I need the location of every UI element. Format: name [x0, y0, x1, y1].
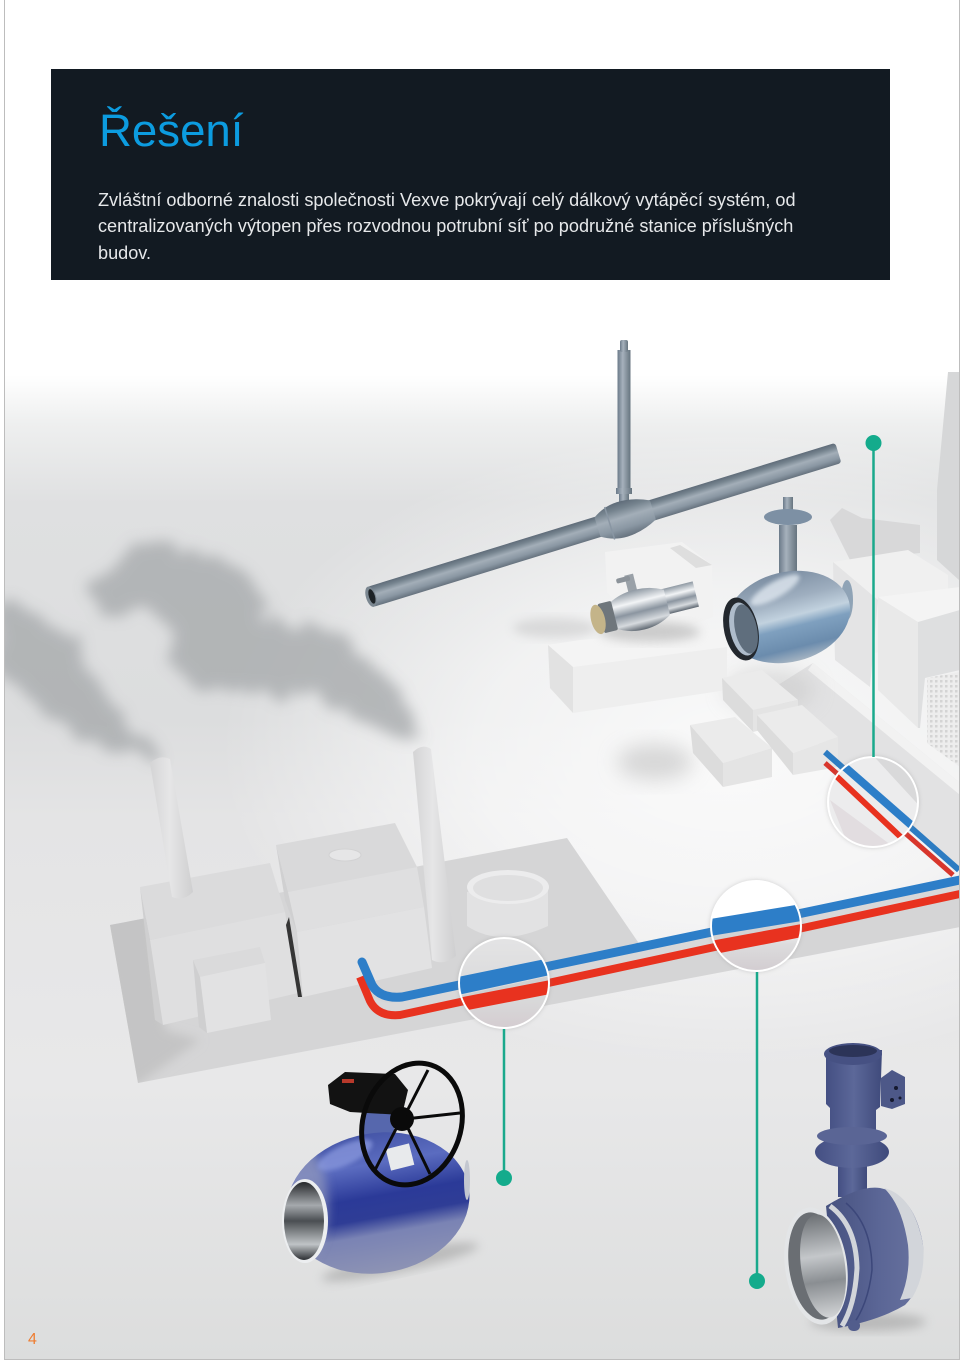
box B [757, 705, 838, 775]
box A [722, 670, 798, 732]
left building [140, 863, 298, 1025]
door annex [193, 960, 271, 1033]
magnifier lens 1 [458, 937, 550, 1029]
pre-insulated pipe with long stem valve [361, 340, 844, 615]
title: Řešení [99, 105, 243, 156]
smoke plume from the tall chimney [90, 546, 425, 740]
district heating pipes [360, 752, 960, 1015]
heat plant buildings [140, 747, 549, 1033]
magnifier lens 2 [710, 880, 802, 972]
bolted crown [824, 1043, 882, 1065]
handwheel [359, 1060, 465, 1188]
gearbox [328, 1072, 414, 1131]
blue butterfly valve [777, 1043, 926, 1331]
long low building [548, 645, 711, 713]
teal leader line: lower right [749, 972, 765, 1289]
valve opening [723, 598, 759, 660]
box C [690, 717, 772, 787]
teal leader line: lower left [496, 1029, 512, 1186]
right building [276, 823, 432, 997]
perforated block [927, 675, 958, 762]
smoke plume from the short chimney [0, 600, 160, 755]
intro text: Zvláštní odborné znalosti společnosti Vexve pokrývají celý dálkový vytápěcí systém, od [98, 190, 796, 210]
blue ball valve with handwheel [282, 1060, 478, 1285]
storage tank [467, 870, 549, 937]
intro text: budov. [98, 243, 151, 263]
page number: 4 [28, 1331, 37, 1348]
teal leader line: upper right [866, 435, 882, 757]
large steel ball valve [723, 497, 853, 664]
pipe opening [282, 1179, 328, 1263]
valve drum [826, 1188, 924, 1328]
city block B [878, 587, 960, 728]
city block A [833, 550, 914, 687]
magnifier lens 3 [827, 750, 925, 850]
small stainless ball valve [590, 574, 701, 646]
nameplate [386, 1143, 414, 1171]
box behind the small valve [670, 545, 712, 568]
intro text [98, 190, 796, 263]
short chimney [150, 757, 193, 899]
background city buildings [513, 372, 960, 870]
factory ground slab [110, 838, 960, 1083]
valve bore [777, 1203, 855, 1329]
intro text: centralizovaných výtopen přes rozvodnou potrubní síť po podružné stanice příslušných [98, 216, 793, 236]
header panel [51, 69, 890, 280]
side block [881, 1070, 905, 1109]
tall chimney [413, 746, 444, 962]
roof disc [330, 850, 360, 860]
